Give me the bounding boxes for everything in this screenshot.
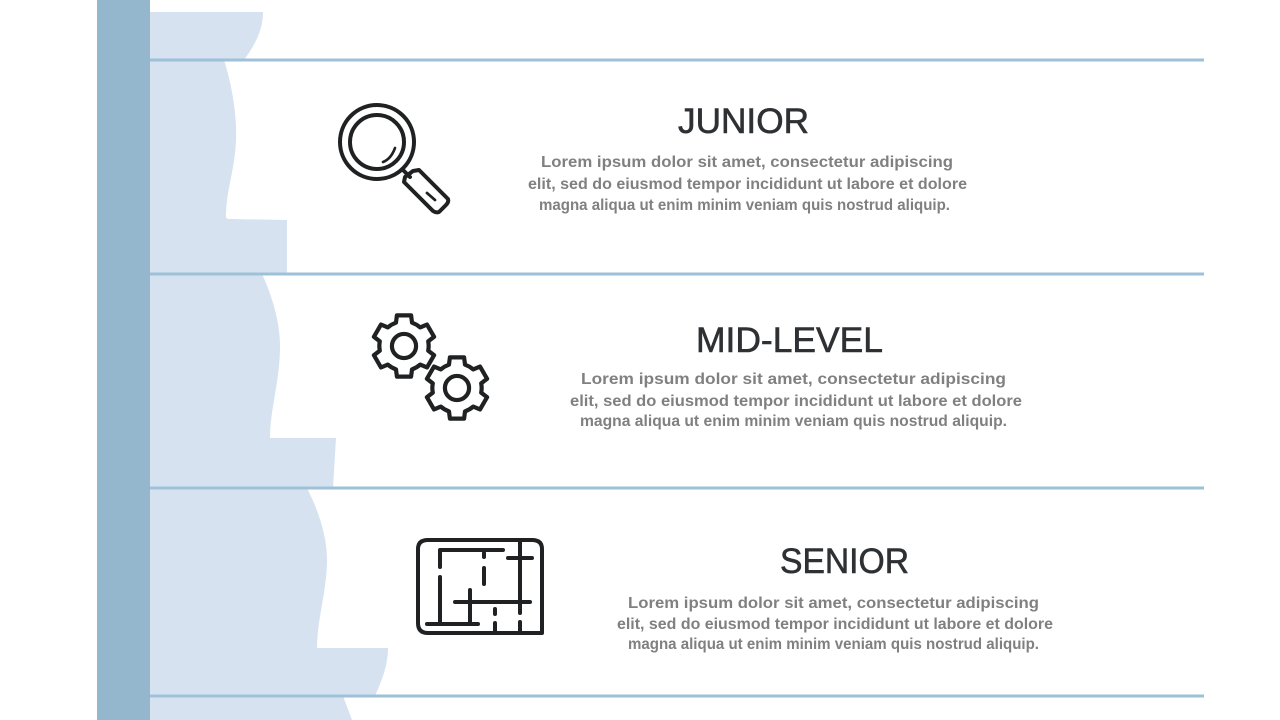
heading: mid-level: MID-LEVEL bbox=[696, 321, 883, 360]
text block: senior description: elit, sed do eiusmod tempor incididunt ut labore et dolore bbox=[617, 616, 1053, 633]
panel: junior bbox=[340, 102, 967, 214]
text block: mid-level description: magna aliqua ut enim minim veniam quis nostrud aliquip. bbox=[580, 413, 1007, 430]
text block: mid-level description bbox=[570, 371, 1022, 430]
horizontal tier lines bbox=[150, 58, 1204, 698]
text block: senior description: Lorem ipsum dolor sit amet, consectetur adipiscing bbox=[628, 595, 1039, 612]
text block: junior description: elit, sed do eiusmod tempor incididunt ut labore et dolore bbox=[528, 176, 967, 193]
text block: junior description bbox=[528, 154, 967, 214]
text block: junior description: magna aliqua ut enim minim veniam quis nostrud aliquip. bbox=[539, 197, 950, 214]
text block: senior description bbox=[617, 595, 1053, 653]
heading: senior: SENIOR bbox=[780, 542, 909, 581]
heading: junior: JUNIOR bbox=[678, 102, 809, 141]
vertical sidebar bar bbox=[97, 0, 150, 720]
icon: gears bbox=[374, 315, 487, 419]
background staircase silhouette bbox=[150, 12, 388, 720]
text block: senior description: magna aliqua ut enim minim veniam quis nostrud aliquip. bbox=[628, 636, 1039, 653]
text block: junior description: Lorem ipsum dolor sit amet, consectetur adipiscing bbox=[541, 154, 953, 171]
panel: senior bbox=[418, 540, 1053, 653]
text block: mid-level description: Lorem ipsum dolor sit amet, consectetur adipiscing bbox=[581, 371, 1006, 388]
panel: mid-level bbox=[374, 315, 1022, 430]
icon: magnifying glass bbox=[340, 105, 448, 212]
text block: mid-level description: elit, sed do eiusmod tempor incididunt ut labore et dolore bbox=[570, 393, 1022, 410]
icon: blueprint floor plan bbox=[418, 540, 542, 633]
